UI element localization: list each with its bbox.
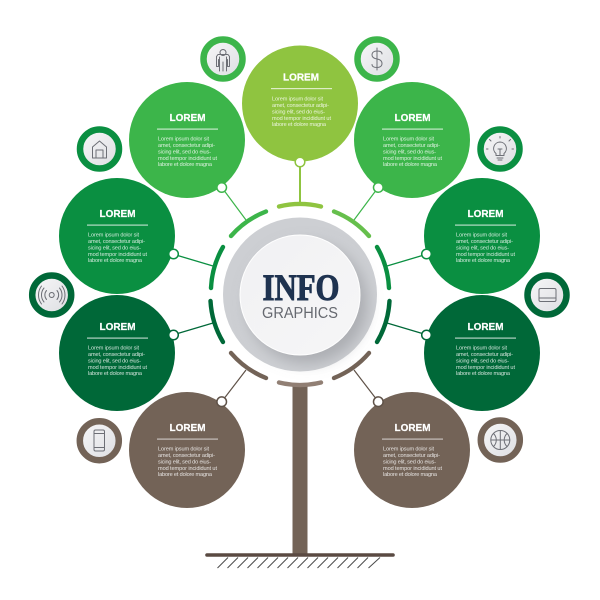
- segmented ring: [210, 204, 390, 385]
- panel: bottom left circle: [129, 392, 245, 508]
- panel: upper left circle: mod tempor incididunt ut: [158, 156, 217, 162]
- icon: basketball: [481, 420, 520, 460]
- panel: middle left circle: [59, 178, 175, 294]
- panel: upper right circle: mod tempor incididunt ut: [383, 156, 442, 162]
- panel: middle right circle: Lorem ipsum dolor sit: [456, 233, 507, 239]
- panel: lower left circle: LOREM: [100, 321, 136, 333]
- panel: lower right circle: LOREM: [468, 321, 504, 333]
- ground hatching: [218, 558, 380, 568]
- panel: upper left circle: [129, 82, 245, 198]
- panel: bottom right circle: [354, 392, 470, 508]
- central badge: [223, 218, 377, 372]
- panel: bottom left circle: amet, consectetur adipi-: [158, 453, 215, 459]
- panel: middle right circle: [424, 178, 540, 294]
- panel: top circle: labore et dolore magna: [272, 122, 327, 128]
- panel: middle right circle: labore et dolore magna: [456, 258, 511, 264]
- panel: lower left circle: amet, consectetur adipi-: [88, 352, 145, 358]
- subtitle: GRAPHICS: GRAPHICS: [262, 305, 338, 322]
- panel: middle left circle: sicing elit, sed do eius-: [88, 245, 141, 251]
- panel: lower left circle: Lorem ipsum dolor sit: [88, 346, 139, 352]
- panel: middle right circle: mod tempor incididunt ut: [456, 252, 515, 258]
- panel: bottom right circle: amet, consectetur adipi-: [383, 453, 440, 459]
- panel: lower right circle: mod tempor incididunt ut: [456, 365, 515, 371]
- trunk: [292, 385, 308, 555]
- panel: lower left circle: labore et dolore magna: [88, 371, 143, 377]
- title: INFO: INFO: [262, 268, 340, 309]
- ground line: [207, 553, 393, 557]
- panel: upper left circle: Lorem ipsum dolor sit: [158, 137, 209, 143]
- panel: upper right circle: LOREM: [394, 112, 431, 124]
- icon: light bulb: [480, 130, 520, 168]
- panel: bottom right circle: sicing elit, sed do eius-: [383, 459, 436, 465]
- icon: dollar: [358, 40, 396, 78]
- panel: upper right circle: amet, consectetur adipi-: [383, 143, 440, 149]
- panel: middle left circle: labore et dolore magna: [88, 258, 143, 264]
- panel: upper left circle: LOREM: [170, 112, 206, 124]
- panel: lower right circle: Lorem ipsum dolor sit: [456, 346, 507, 352]
- panel: upper right circle: Lorem ipsum dolor sit: [383, 137, 434, 143]
- connector dots: [169, 157, 431, 407]
- panel: middle right circle: amet, consectetur adipi-: [456, 239, 513, 245]
- panel: top circle: mod tempor incididunt ut: [272, 116, 331, 122]
- panel: lower right circle: labore et dolore magna: [456, 371, 511, 377]
- panel: top circle: [242, 46, 358, 162]
- panel: top circle: amet, consectetur adipi-: [272, 103, 329, 109]
- icon: tablet: [528, 276, 566, 314]
- icon: house: [80, 130, 119, 168]
- icon: smartphone: [80, 421, 119, 460]
- panel: bottom right circle: Lorem ipsum dolor sit: [383, 447, 434, 453]
- icon: wireless signal: [32, 276, 71, 314]
- panel: lower right circle: [424, 295, 540, 411]
- panel: middle left circle: LOREM: [100, 208, 136, 220]
- panel: upper right circle: [354, 82, 470, 198]
- panel: upper left circle: labore et dolore magna: [158, 162, 213, 168]
- panel: bottom left circle: sicing elit, sed do eius-: [158, 459, 211, 465]
- panel: middle left circle: Lorem ipsum dolor sit: [88, 233, 139, 239]
- panel: upper left circle: amet, consectetur adipi-: [158, 143, 215, 149]
- panel: top circle: LOREM: [283, 72, 319, 84]
- panel: bottom right circle: labore et dolore magna: [383, 472, 438, 478]
- icon: person: [204, 40, 242, 78]
- panel: lower right circle: amet, consectetur adipi-: [456, 352, 513, 358]
- panel: bottom right circle: mod tempor incididunt ut: [383, 466, 442, 472]
- panel: upper right circle: labore et dolore magna: [383, 162, 438, 168]
- panel: lower left circle: [59, 295, 175, 411]
- panel: middle right circle: LOREM: [468, 208, 504, 220]
- panel: bottom right circle: LOREM: [394, 422, 431, 434]
- panel: lower right circle: sicing elit, sed do eius-: [456, 358, 509, 364]
- panel: lower left circle: mod tempor incididunt ut: [88, 365, 147, 371]
- panel: upper left circle: sicing elit, sed do eius-: [158, 149, 211, 155]
- panel: bottom left circle: labore et dolore magna: [158, 472, 213, 478]
- panel: bottom left circle: mod tempor incididunt ut: [158, 466, 217, 472]
- panel: top circle: sicing elit, sed do eius-: [272, 109, 325, 115]
- panel: lower left circle: sicing elit, sed do eius-: [88, 358, 141, 364]
- panel: top circle: Lorem ipsum dolor sit: [272, 97, 323, 103]
- panel: bottom left circle: LOREM: [170, 422, 206, 434]
- connector lines: [176, 165, 424, 400]
- panel: upper right circle: sicing elit, sed do eius-: [383, 149, 436, 155]
- panel: bottom left circle: Lorem ipsum dolor sit: [158, 447, 209, 453]
- panel: middle right circle: sicing elit, sed do eius-: [456, 245, 509, 251]
- panel: middle left circle: amet, consectetur adipi-: [88, 239, 145, 245]
- panel: middle left circle: mod tempor incididunt ut: [88, 252, 147, 258]
